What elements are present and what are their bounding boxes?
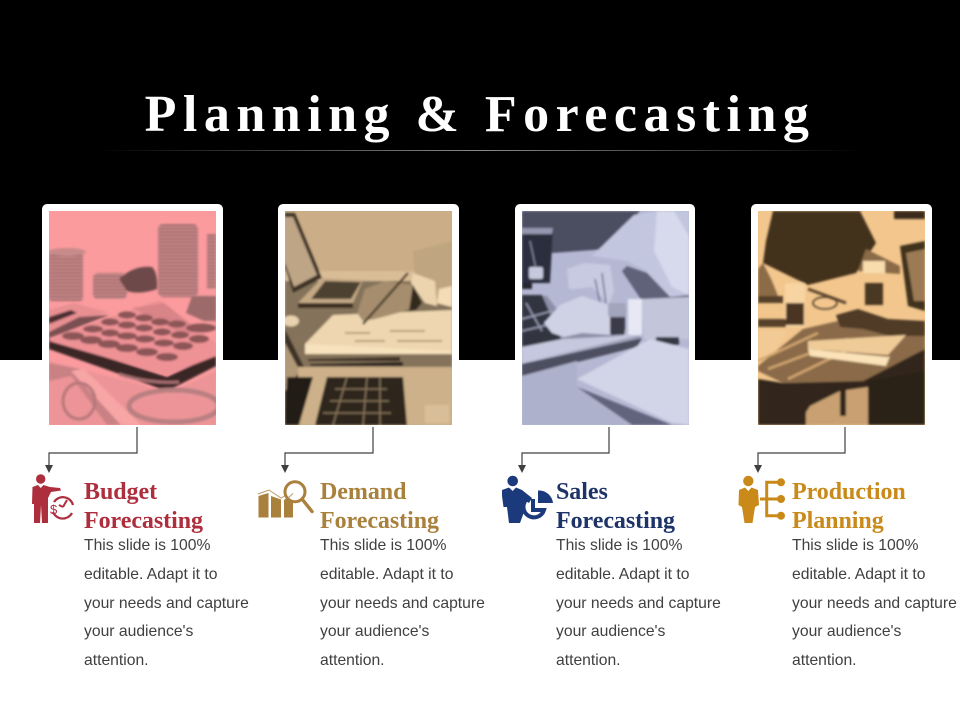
panel: production planning <box>738 204 957 669</box>
black header band <box>0 0 960 360</box>
title underline <box>95 150 865 151</box>
icon: person with pie wheel <box>502 476 553 523</box>
panel: demand forecasting <box>258 204 485 669</box>
connector arrow <box>45 427 138 473</box>
icon: chart with magnifier <box>258 480 314 518</box>
text block: editable. Adapt it to <box>320 566 453 583</box>
text block: your audience's <box>556 623 665 640</box>
text block: your needs and capture <box>84 594 249 612</box>
title: Planning & Forecasting <box>145 86 815 143</box>
text block: This slide is 100% <box>84 537 210 554</box>
text block <box>84 537 249 669</box>
photo card: typing on a laptop <box>515 204 695 429</box>
icon: person with org tree <box>738 476 785 523</box>
heading: Forecasting <box>84 508 203 534</box>
text block: your needs and capture <box>320 594 485 612</box>
text block: attention. <box>792 652 857 669</box>
icon: person with budget clock <box>32 474 74 523</box>
text block: This slide is 100% <box>556 537 682 554</box>
text block: attention. <box>556 652 621 669</box>
text block: editable. Adapt it to <box>556 566 689 583</box>
photo card: people at a wooden table <box>751 204 932 429</box>
text block: your needs and capture <box>792 594 957 612</box>
text block <box>556 537 721 669</box>
text block: your audience's <box>792 623 901 640</box>
text block <box>792 537 957 669</box>
text block <box>320 537 485 669</box>
connector arrow <box>518 427 610 473</box>
photo card: calculator and coins <box>42 204 223 429</box>
text block: attention. <box>84 652 149 669</box>
heading: Planning <box>792 508 884 534</box>
panel: budget forecasting <box>32 204 249 669</box>
heading: Demand <box>320 479 406 505</box>
icon: person with budget clock: $ <box>50 502 58 517</box>
heading: Production <box>792 479 906 505</box>
photo card: hand writing between laptops <box>278 204 459 429</box>
connector arrow <box>754 427 846 473</box>
heading <box>84 479 203 534</box>
text block: your audience's <box>84 623 193 640</box>
heading: Sales <box>556 479 608 505</box>
heading <box>556 479 675 534</box>
heading: Forecasting <box>556 508 675 534</box>
text block: This slide is 100% <box>792 537 918 554</box>
heading: Budget <box>84 479 157 505</box>
text block: your audience's <box>320 623 429 640</box>
text block: your needs and capture <box>556 594 721 612</box>
text block: editable. Adapt it to <box>792 566 925 583</box>
text block: This slide is 100% <box>320 537 446 554</box>
heading: Forecasting <box>320 508 439 534</box>
panel: sales forecasting <box>502 204 721 669</box>
text block: editable. Adapt it to <box>84 566 217 583</box>
heading <box>320 479 439 534</box>
text block: attention. <box>320 652 385 669</box>
heading <box>792 479 906 534</box>
connector arrow <box>281 427 374 473</box>
